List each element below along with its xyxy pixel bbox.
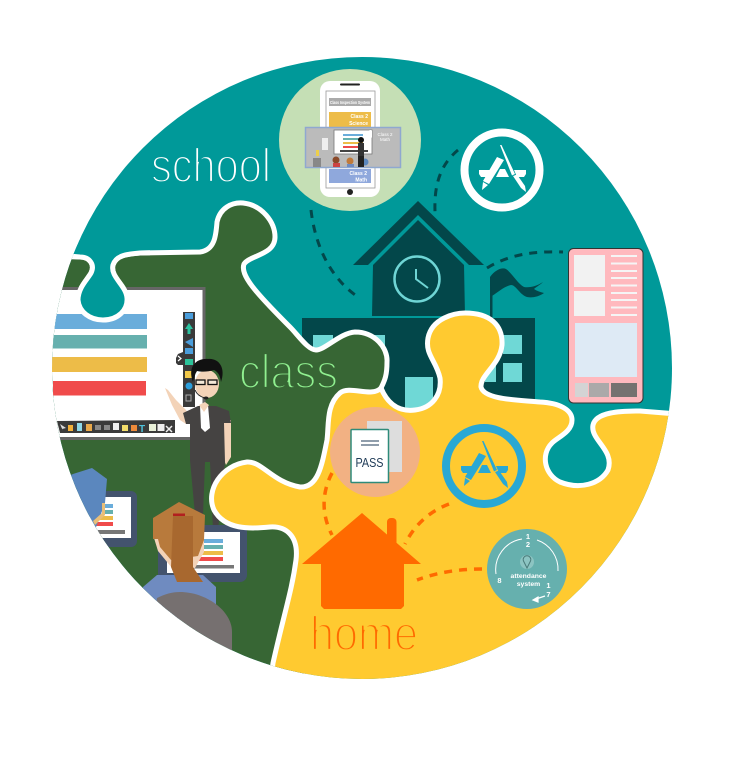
icon: phone in green circle: Math bbox=[355, 178, 367, 184]
icon: phone in green circle: Class 2 bbox=[349, 171, 367, 177]
horizontal toolbar: T bbox=[139, 424, 145, 435]
icon: attendance system: attendance bbox=[511, 573, 547, 580]
icon: attendance system: system bbox=[517, 581, 540, 588]
icon: attendance system: 8 bbox=[497, 576, 502, 585]
icon: pass document bbox=[330, 407, 420, 497]
building windows bbox=[313, 335, 522, 412]
icon: phone in green circle bbox=[279, 69, 421, 211]
heading: class: class bbox=[239, 346, 338, 399]
icon: phone in green circle: Science bbox=[349, 121, 368, 127]
whiteboard bars bbox=[50, 314, 147, 396]
horizontal toolbar bbox=[57, 420, 175, 433]
icon: phone in green circle: Class Inspection System bbox=[330, 100, 370, 105]
teal knob over whiteboard bbox=[70, 240, 140, 320]
dashed connectors: home bbox=[324, 473, 482, 580]
icon: app store white bbox=[464, 132, 540, 208]
icon: attendance system: 2 bbox=[526, 540, 530, 549]
panel: school background bbox=[40, 50, 680, 690]
classroom popup: Math bbox=[380, 137, 390, 142]
icon: attendance system bbox=[487, 529, 567, 609]
interactive whiteboard bbox=[40, 288, 204, 438]
icon: attendance system: 7 bbox=[546, 590, 551, 599]
icon: attendance system: 1 bbox=[526, 532, 530, 541]
teacher figure bbox=[165, 359, 231, 530]
heading: school: school bbox=[151, 140, 271, 193]
icon: app store blue bbox=[446, 428, 522, 504]
panel: class puzzle piece bbox=[52, 200, 390, 674]
icon: flag bbox=[490, 268, 544, 319]
icon: phone in green circle: Class 2 bbox=[350, 114, 368, 120]
icon: clock bbox=[394, 256, 440, 302]
classroom popup: Class 2 bbox=[377, 132, 393, 137]
school building bbox=[302, 201, 544, 412]
right student and tablet bbox=[143, 502, 247, 660]
icon: attendance system: 1 bbox=[546, 581, 551, 590]
icon: house bbox=[302, 513, 421, 609]
icon: pass document: PASS bbox=[356, 456, 384, 470]
knob outline bbox=[68, 253, 150, 320]
puzzle circle bbox=[52, 57, 672, 679]
panel: home puzzle piece bbox=[212, 313, 690, 700]
left student and tablet bbox=[71, 468, 137, 547]
dashed connectors: school bbox=[311, 150, 563, 297]
heading: home: home bbox=[310, 608, 418, 661]
panel: pink tablet bbox=[568, 248, 643, 403]
classroom popup bbox=[306, 128, 400, 168]
vertical toolbar bbox=[176, 312, 195, 407]
